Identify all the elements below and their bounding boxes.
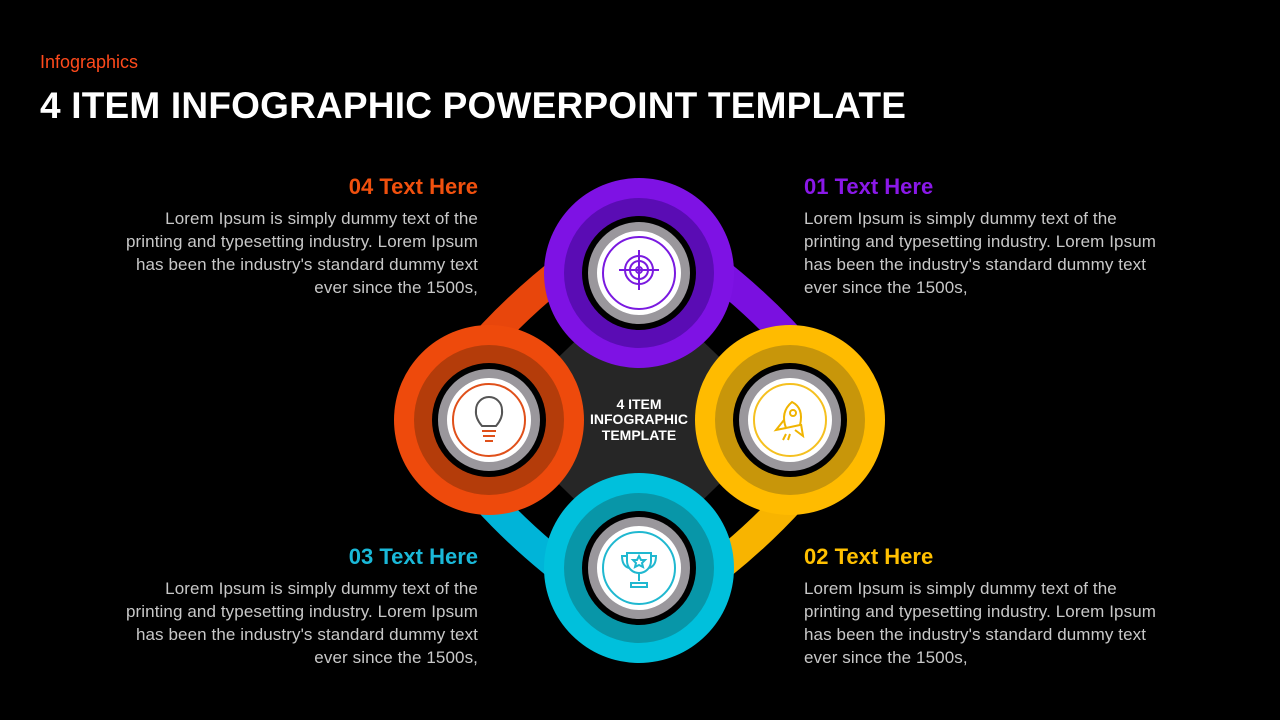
icon: target <box>619 250 659 290</box>
center label <box>590 396 688 443</box>
icon: trophy <box>622 553 656 587</box>
text block 02: ever since the 1500s, <box>804 648 968 667</box>
text block 04: printing and typesetting industry. Lorem Ipsum <box>126 232 478 251</box>
circle 02 yellow <box>695 325 885 515</box>
text block 03 <box>126 544 478 667</box>
circle 04 orange <box>394 325 584 515</box>
center label: 4 ITEM <box>616 396 662 412</box>
circle 03 cyan <box>544 473 734 663</box>
text block 04: Lorem Ipsum is simply dummy text of the <box>165 209 478 228</box>
text block 04: has been the industry's standard dummy text <box>136 255 478 274</box>
text block 03: ever since the 1500s, <box>314 648 478 667</box>
text block 01: 01 Text Here <box>804 174 933 199</box>
text block 04: ever since the 1500s, <box>314 278 478 297</box>
text block 03: printing and typesetting industry. Lorem Ipsum <box>126 602 478 621</box>
text block 02: 02 Text Here <box>804 544 933 569</box>
subtitle: Infographics <box>40 52 138 72</box>
text block 02 <box>804 544 1156 667</box>
circle 01 purple <box>544 178 734 368</box>
text block 03: 03 Text Here <box>349 544 478 569</box>
icon: bulb <box>476 397 502 441</box>
text block 04: 04 Text Here <box>349 174 478 199</box>
text block 01: ever since the 1500s, <box>804 278 968 297</box>
text block 01 <box>804 174 1156 297</box>
text block 01: printing and typesetting industry. Lorem Ipsum <box>804 232 1156 251</box>
connectors <box>470 250 808 590</box>
text block 01: Lorem Ipsum is simply dummy text of the <box>804 209 1117 228</box>
text block 02: has been the industry's standard dummy text <box>804 625 1146 644</box>
center diamond <box>493 280 785 562</box>
center label: INFOGRAPHIC <box>590 411 688 427</box>
text block 02: printing and typesetting industry. Lorem Ipsum <box>804 602 1156 621</box>
text block 03: has been the industry's standard dummy text <box>136 625 478 644</box>
text block 02: Lorem Ipsum is simply dummy text of the <box>804 579 1117 598</box>
text block 01: has been the industry's standard dummy text <box>804 255 1146 274</box>
text block 04 <box>126 174 478 297</box>
icon: rocket <box>776 402 803 440</box>
title: 4 ITEM INFOGRAPHIC POWERPOINT TEMPLATE <box>40 85 906 126</box>
text block 03: Lorem Ipsum is simply dummy text of the <box>165 579 478 598</box>
center label: TEMPLATE <box>602 427 676 443</box>
